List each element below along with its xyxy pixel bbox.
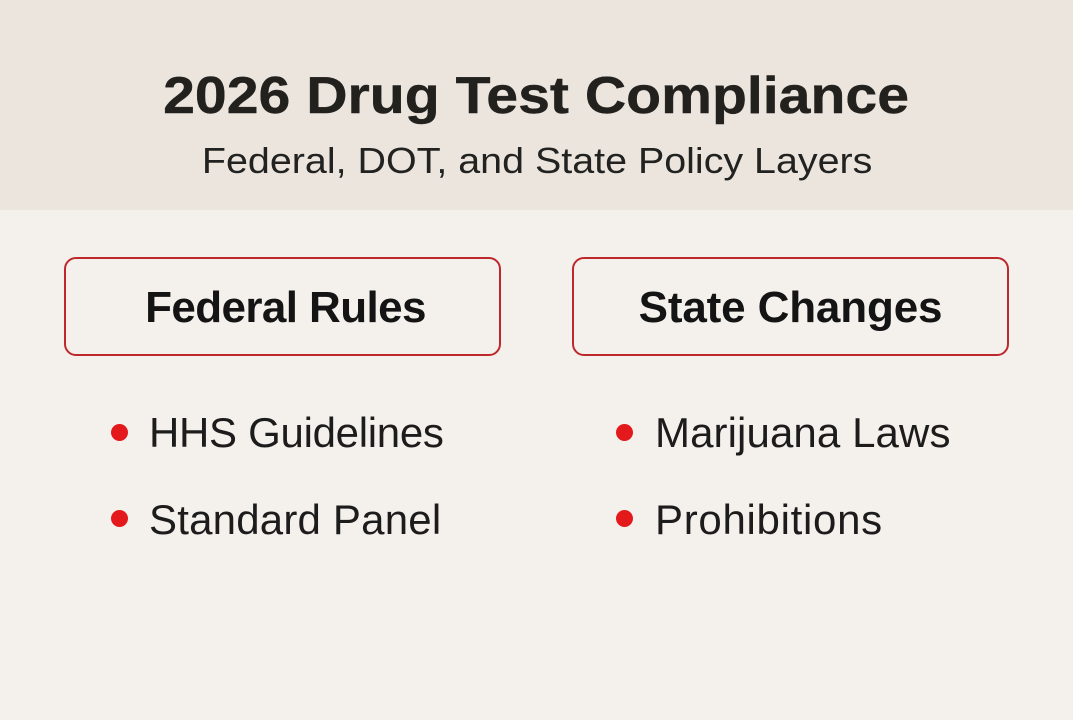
- subtitle: Federal, DOT, and State Policy Layers: [202, 140, 872, 181]
- bullet: HHS Guidelines: HHS Guidelines: [149, 409, 444, 456]
- bullet: Standard Panel: Standard Panel: [149, 496, 441, 543]
- header band: [0, 0, 1073, 210]
- heading: federal rules: [64, 257, 501, 356]
- heading: federal rules: Federal Rules: [145, 283, 426, 332]
- title: 2026 Drug Test Compliance: [163, 67, 909, 125]
- panel: federal rules: [64, 257, 501, 543]
- bullet: Marijuana Laws: Marijuana Laws: [655, 409, 951, 456]
- heading: state changes: [572, 257, 1009, 356]
- panel: state changes: [572, 257, 1009, 543]
- bullet: Prohibitions: Prohibitions: [655, 496, 883, 543]
- heading: state changes: State Changes: [639, 283, 942, 332]
